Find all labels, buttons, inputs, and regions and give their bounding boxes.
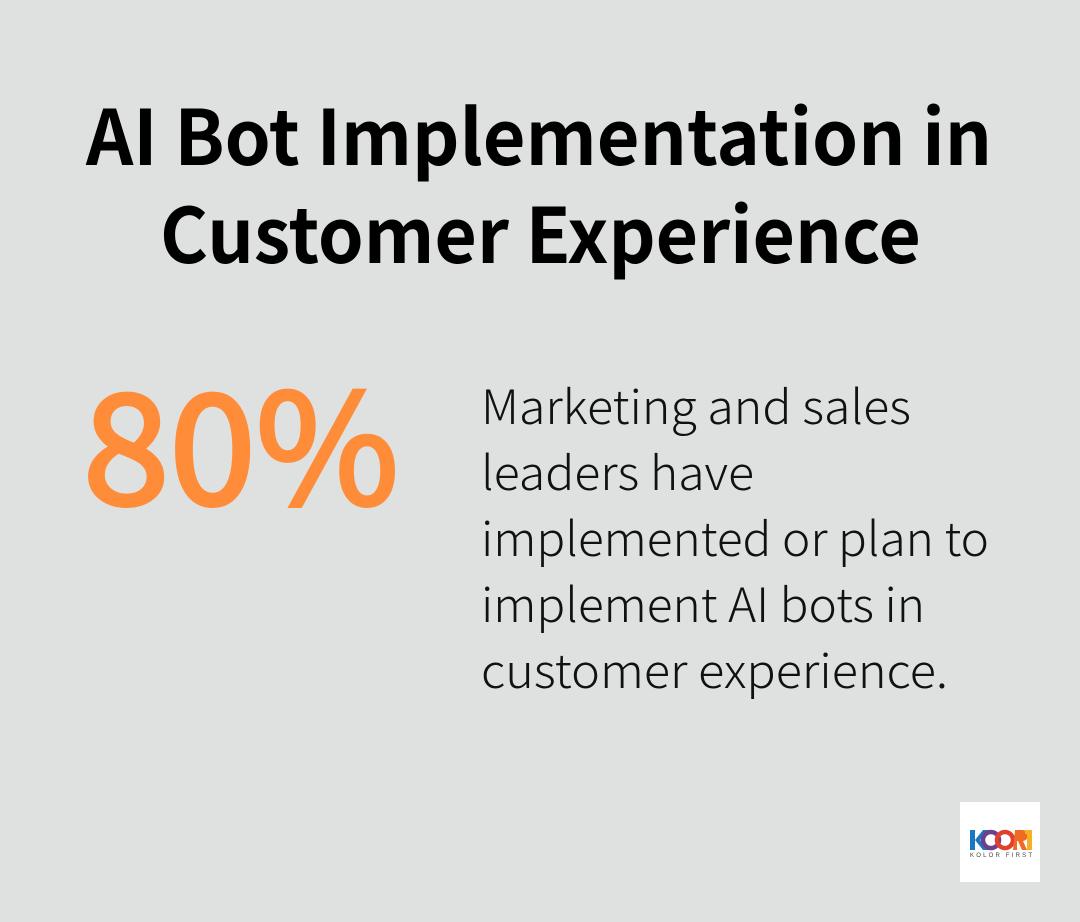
description text: customer experience.	[481, 633, 948, 702]
description text	[481, 369, 989, 702]
big statistic: 80%: 80%	[83, 328, 399, 548]
description text: implemented or plan to	[481, 501, 989, 570]
description text: leaders have	[481, 435, 754, 504]
logo: KOOR1 Kolor First: KOLOR FIRST	[970, 853, 1032, 859]
title: AI Bot Implementation in	[85, 77, 992, 187]
logo: KOOR1 Kolor First	[960, 802, 1040, 882]
title: Customer Experience	[160, 175, 921, 285]
description text: implement AI bots in	[481, 567, 925, 636]
description text: Marketing and sales	[481, 369, 911, 438]
title	[85, 77, 992, 285]
